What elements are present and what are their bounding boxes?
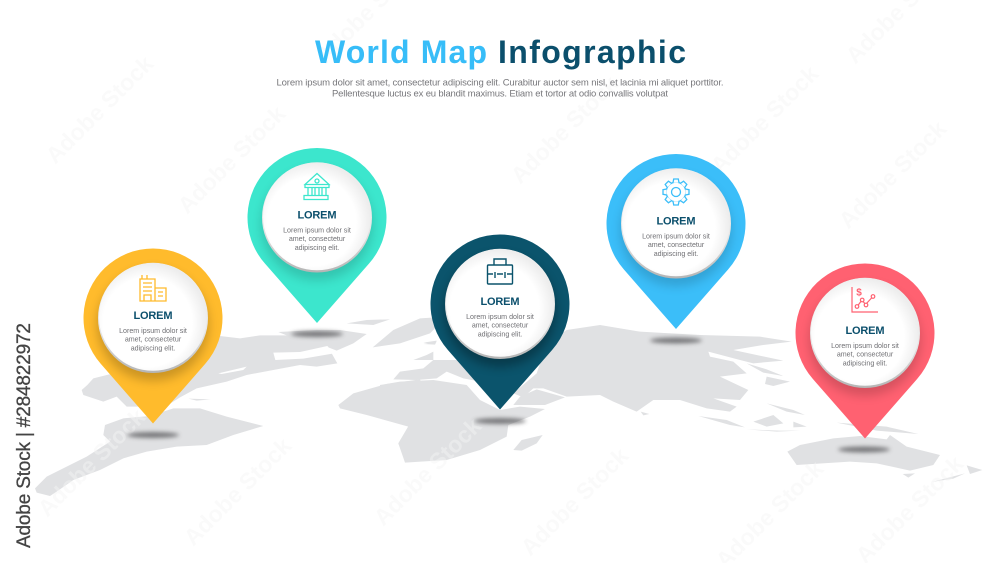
icon: gear xyxy=(663,179,689,205)
icon: finance chart: $ xyxy=(856,288,862,298)
map: europe, africa, arabia and madagascar xyxy=(380,341,565,463)
body text: Lorem ipsum dolor sit xyxy=(831,342,899,350)
icon: office buildings xyxy=(140,275,166,301)
heading: LOREM xyxy=(298,210,336,222)
body text: amet, consectetur xyxy=(125,336,182,344)
stock watermarks: Adobe Stock xyxy=(705,60,823,178)
map: asia xyxy=(513,325,805,415)
pin 1: yellow xyxy=(84,249,222,424)
body text xyxy=(831,342,899,368)
body text xyxy=(466,313,534,338)
icon: briefcase xyxy=(488,259,512,284)
pin 3: navy xyxy=(430,235,570,410)
icon: bank xyxy=(304,174,329,200)
heading: LOREM xyxy=(134,310,172,322)
body text: adipiscing elit. xyxy=(478,330,522,338)
heading: LOREM xyxy=(846,325,884,337)
body text: Lorem ipsum dolor sit xyxy=(466,313,534,321)
body text: amet, consectetur xyxy=(472,322,529,330)
body text: adipiscing elit. xyxy=(295,244,339,252)
stock watermarks: Adobe Stock xyxy=(178,432,296,550)
stock watermarks: Adobe Stock xyxy=(515,442,633,560)
stock watermarks: Adobe Stock xyxy=(368,412,486,530)
side stock id label: Adobe Stock | #284822972 xyxy=(14,323,35,548)
heading: LOREM xyxy=(656,216,696,228)
title xyxy=(315,34,686,70)
map: australia and oceania xyxy=(698,415,982,482)
stock watermarks: Adobe Stock xyxy=(833,115,951,233)
body text: Lorem ipsum dolor sit xyxy=(283,226,351,234)
subtitle text: Lorem ipsum dolor sit amet, consectetur adipiscing elit. Curabitur auctor sem nisl, et lacinia mi aliquet porttitor. xyxy=(276,78,724,88)
body text: amet, consectetur xyxy=(289,235,346,243)
pin 2: teal xyxy=(248,148,386,323)
stock watermarks: Adobe Stock xyxy=(40,50,158,168)
world map xyxy=(35,317,982,496)
pin 5: red xyxy=(796,264,934,438)
pin 4: blue xyxy=(606,154,746,329)
body text xyxy=(642,232,710,258)
body text: adipiscing elit. xyxy=(131,344,175,352)
body text: Lorem ipsum dolor sit xyxy=(642,232,710,240)
icon: finance chart xyxy=(852,287,878,312)
body text: Lorem ipsum dolor sit xyxy=(119,327,187,335)
body text xyxy=(119,327,187,352)
body text: adipiscing elit. xyxy=(843,360,887,368)
body text: amet, consectetur xyxy=(648,241,705,249)
stock watermarks: Adobe Stock xyxy=(172,100,290,218)
subtitle text xyxy=(276,78,724,100)
body text: amet, consectetur xyxy=(837,351,894,359)
stock watermarks: Adobe Stock xyxy=(32,403,150,521)
body text xyxy=(283,226,351,252)
stock watermarks: Adobe Stock xyxy=(505,70,623,188)
heading: LOREM xyxy=(480,296,520,308)
title: Infographic xyxy=(498,34,686,70)
body text: adipiscing elit. xyxy=(654,250,698,258)
subtitle text: Pellentesque luctus ex eu blandit maximus. Etiam et tortor at odio convallis volutpat xyxy=(332,88,668,100)
pin shadows on map xyxy=(127,331,890,452)
title: World Map xyxy=(315,34,487,70)
map: americas and greenland xyxy=(35,317,447,496)
